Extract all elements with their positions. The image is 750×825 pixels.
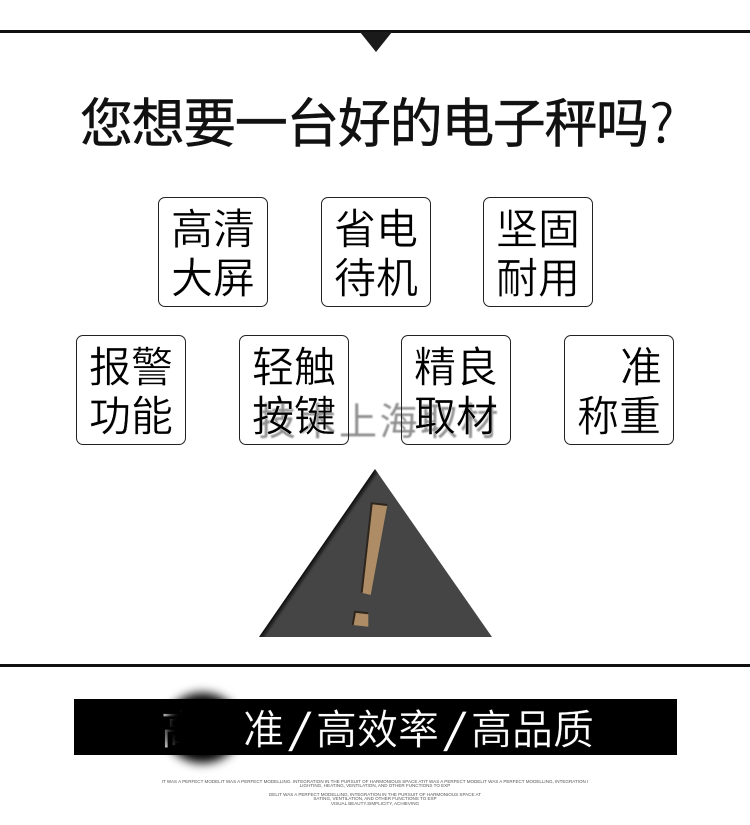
feature card: 省电待机: 待机 xyxy=(334,255,418,302)
watermark: 技术上海取材 xyxy=(258,402,501,444)
title: ? xyxy=(649,80,673,159)
feature card: 坚固耐用: 耐用 xyxy=(496,255,580,302)
feature card: 精良取材: 精良 xyxy=(414,344,498,391)
slogan bar xyxy=(74,699,677,755)
feature card: 坚固耐用 xyxy=(483,197,593,307)
fine print: IT WAS A PERFECT MODELIT WAS A PERFECT MODELLING. INTEGRATION IN THE PURSUIT OF HARMONIOUS SPACE ATIT WAS A PERFECT MODELIT WAS A PERFECT MODELLING, INTEGRATION I xyxy=(162,779,588,784)
feature card: 高清大屏: 高清 xyxy=(171,206,255,253)
feature card: 报警功能 xyxy=(76,335,186,445)
lower rule xyxy=(0,664,750,667)
feature card: 报警功能: 功能 xyxy=(89,393,173,440)
icon: downward triangle marker xyxy=(360,32,392,52)
feature card: 高清大屏 xyxy=(158,197,268,307)
feature card: 准称重: 准 xyxy=(620,344,662,391)
feature card: 精良取材 xyxy=(401,335,511,445)
feature card: 坚固耐用: 坚固 xyxy=(496,206,580,253)
feature card: 报警功能: 报警 xyxy=(89,344,173,391)
feature card: 准称重: 称重 xyxy=(577,393,661,440)
title: 您想要一台好的电子秤吗 xyxy=(80,82,648,158)
fine print: VISUAL BEAUTY.SIMPLICITY, ACHIEVING xyxy=(331,801,419,806)
fine print xyxy=(162,779,588,806)
feature card: 轻触按键 xyxy=(239,335,349,445)
slogan text: / xyxy=(287,696,313,756)
fine print: LIGHTING, HEATING, VENTILATION, AND OTHER FUNCTIONS TO EXP xyxy=(300,783,450,788)
fine print: SATING, VENTILATION, AND OTHER FUNCTIONS TO EXP xyxy=(313,796,437,801)
feature card: 准称重 xyxy=(564,335,674,445)
feature card: 精良取材: 取材 xyxy=(414,393,498,440)
feature card: 高清大屏: 大屏 xyxy=(171,255,255,302)
slogan text: 高精准 高效率 高品质 xyxy=(161,696,594,756)
slogan text: / xyxy=(442,696,468,756)
icon: warning triangle with exclamation mark xyxy=(259,469,492,637)
top rule xyxy=(0,30,750,33)
feature card: 轻触按键: 按键 xyxy=(252,393,336,440)
feature card: 省电待机 xyxy=(321,197,431,307)
blurred smudge over slogan xyxy=(164,693,241,763)
feature card: 轻触按键: 轻触 xyxy=(252,344,336,391)
fine print: DELIT WAS A PERFECT MODELLING, INTEGRATION IN THE PURSUIT OF HARMONIOUS SPACE AT xyxy=(269,792,481,797)
feature card: 省电待机: 省电 xyxy=(334,206,418,253)
